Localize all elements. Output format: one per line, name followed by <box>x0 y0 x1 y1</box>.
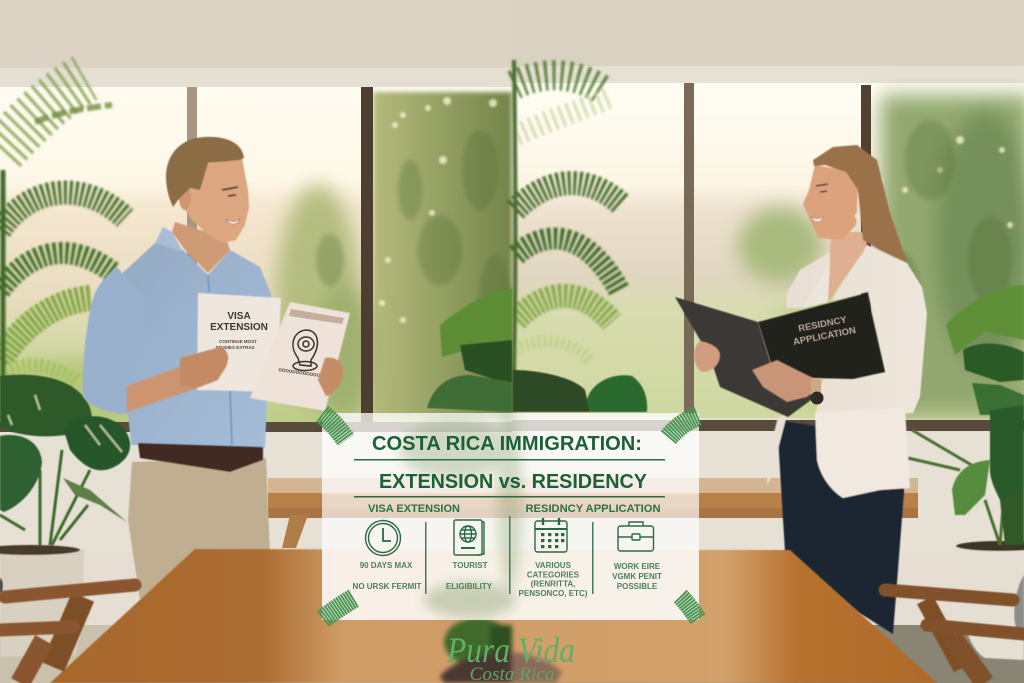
title line two: EXTENSION vs. RESIDENCY <box>379 471 648 493</box>
pot <box>0 549 84 657</box>
man ear <box>179 186 191 210</box>
text: various categories: VARIOUS <box>535 561 571 570</box>
paper small print: CONTINUE MOST <box>219 339 257 344</box>
man torso shirt <box>115 243 271 448</box>
panel ghost plant <box>400 410 522 618</box>
window glass right <box>512 83 1024 418</box>
man hair <box>166 137 244 207</box>
soil <box>0 545 80 555</box>
chair left <box>0 578 135 683</box>
woman blazer lower <box>815 408 910 498</box>
man sleeve <box>83 267 145 414</box>
man smile <box>226 219 240 224</box>
panel backing middle <box>322 494 699 549</box>
paper two header band <box>289 309 344 324</box>
man forearm <box>127 366 197 412</box>
bokeh dots <box>379 97 1013 323</box>
window sill left <box>0 422 512 432</box>
woman <box>767 145 927 634</box>
trees outside <box>0 92 1024 420</box>
folder: residency application <box>675 293 885 417</box>
man <box>83 137 271 600</box>
stems <box>0 450 90 545</box>
window frame top right <box>512 66 1024 84</box>
man collar <box>155 227 183 252</box>
wall lower <box>0 432 1024 552</box>
text: tourist: TOURIST <box>453 561 488 570</box>
paper two caption: OOOOOOOOOOOO <box>278 367 321 378</box>
woman hair <box>813 145 907 262</box>
man belt <box>138 443 263 472</box>
title rule two <box>354 496 665 498</box>
logo: pura vida costa rica <box>446 630 575 683</box>
text: various categories: (RENRITTA, <box>531 580 575 588</box>
woman trousers <box>777 420 905 634</box>
plant: centre monstera <box>427 288 647 412</box>
woman shirt <box>802 246 867 308</box>
column heading: visa extension: VISA EXTENSION <box>368 503 460 515</box>
panel backing bottom <box>322 549 699 620</box>
ceiling blind right <box>512 0 1024 66</box>
column dividers <box>425 516 594 594</box>
woman blazer upper <box>786 245 927 417</box>
folder right cover <box>758 293 885 379</box>
window glass left <box>0 87 512 422</box>
title rule one <box>354 459 665 460</box>
folder text: RESIDNCY <box>797 314 848 335</box>
man face <box>180 158 249 243</box>
table front plant and bowl <box>440 618 562 683</box>
icon: calendar <box>535 518 567 552</box>
floor left <box>0 625 512 683</box>
man neck <box>172 222 230 273</box>
panel backing top <box>322 413 699 494</box>
window frame top left <box>0 68 512 87</box>
text: 90 days max: 90 DAYS MAX <box>360 561 413 570</box>
leaf: bottom right <box>680 596 698 619</box>
text: various categories: CATEGORIES <box>527 570 580 580</box>
man right hand <box>318 358 343 396</box>
paper heading second line: EXTENSION <box>210 322 268 333</box>
paper heading: VISA <box>227 311 251 322</box>
bench <box>268 478 918 548</box>
paper two <box>250 302 350 411</box>
man trousers <box>128 458 270 600</box>
leaf: top left <box>322 414 346 440</box>
leaf: bottom left <box>323 598 354 619</box>
icon: clock <box>366 520 400 556</box>
woman smile <box>811 217 823 222</box>
window mullions <box>187 83 871 422</box>
wristwatch <box>810 378 824 404</box>
paper one <box>197 293 281 392</box>
window sill right <box>512 420 1024 431</box>
foliage texture <box>316 120 1012 345</box>
text: work permit possible: WORK EIRE <box>614 562 660 571</box>
documents: visa extension papers <box>127 293 350 412</box>
plant: right foliage <box>908 285 1024 660</box>
woman face <box>803 165 858 240</box>
woman earring <box>855 214 859 218</box>
text: eligibility: ELIGIBILITY <box>446 582 493 591</box>
column heading: residency application: RESIDNCY APPLICATION <box>526 503 661 515</box>
plant: left monstera and pot <box>0 375 130 657</box>
woman eye <box>816 184 828 192</box>
woman left hand <box>694 341 720 372</box>
folder text second line: APPLICATION <box>792 325 857 348</box>
text: work permit possible: POSSIBLE <box>617 582 658 591</box>
plant: centre palm <box>513 60 622 412</box>
paper small print second line: STUDIES EXTRAS <box>215 345 255 350</box>
woman neck and chest <box>826 232 867 302</box>
conference table <box>50 549 937 683</box>
text: work permit possible: VGMK PENIT <box>612 572 662 581</box>
woman blazer flap <box>767 415 787 485</box>
floor right <box>512 625 1024 683</box>
stems <box>908 420 1010 545</box>
icon: briefcase <box>618 522 654 551</box>
icon: stamp <box>293 330 317 370</box>
woman right hand <box>752 360 817 402</box>
icon: passport <box>454 520 484 555</box>
logo script: Pura Vida <box>446 630 575 670</box>
folder left cover <box>675 297 815 417</box>
chair right <box>885 575 1024 683</box>
text: no work permit: NO URSK FERMIT <box>353 582 422 591</box>
title line one: COSTA RICA IMMIGRATION: <box>372 433 642 455</box>
ceiling blind left <box>0 0 512 68</box>
panel: infographic overlay <box>322 410 699 620</box>
man shirt placket <box>208 275 232 445</box>
man left hand <box>180 347 228 388</box>
text: various categories: PENSONCO, ETC) <box>519 589 588 598</box>
pot <box>952 547 1024 660</box>
leaf: top right <box>668 416 698 438</box>
plant: left palm <box>0 78 125 382</box>
man eye and brow <box>222 187 238 196</box>
